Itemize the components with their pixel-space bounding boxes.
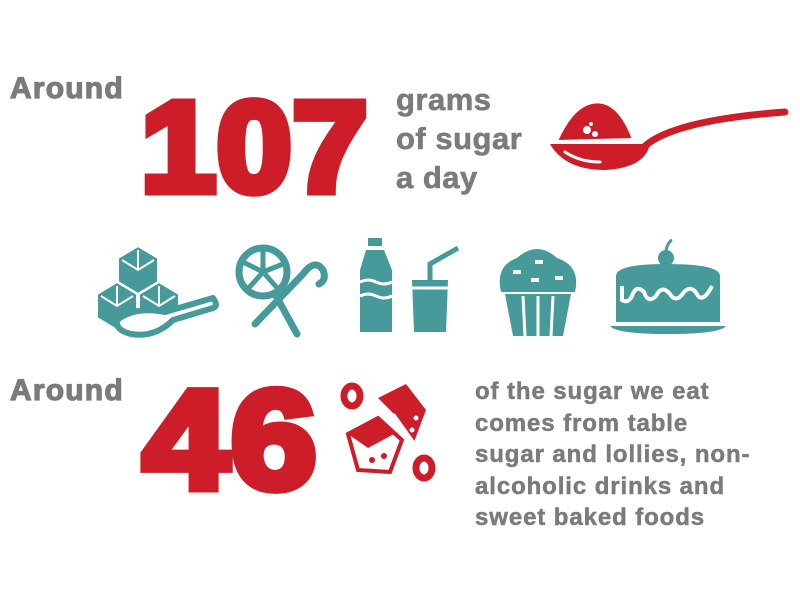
icons row <box>98 238 726 338</box>
text: sugar sources <box>475 378 750 531</box>
icon: spoon with sugar <box>550 103 788 170</box>
label: Around (bottom): Around <box>10 374 124 407</box>
big number 107: 107 <box>141 76 368 219</box>
text: sugar sources: sweet baked foods <box>475 504 705 531</box>
icon: bottle and cup <box>360 238 460 332</box>
text: grams of sugar a day <box>396 82 522 195</box>
label: Around (top): Around <box>10 72 124 105</box>
icon: cake with cherry <box>610 238 726 334</box>
icon: cupcake <box>500 249 576 336</box>
text: grams of sugar a day: a day <box>396 160 478 195</box>
text: sugar sources: sugar and lollies, non- <box>475 441 750 468</box>
text: sugar sources: of the sugar we eat <box>475 378 709 405</box>
icon: sugar cubes with spoon <box>98 247 219 338</box>
text: grams of sugar a day: grams <box>396 82 492 117</box>
text: sugar sources: comes from table <box>475 410 688 436</box>
text: sugar sources: alcoholic drinks and <box>475 472 725 500</box>
icon: percent with dice <box>340 382 436 482</box>
big number 46: 46 <box>143 361 319 518</box>
text: grams of sugar a day: of sugar <box>396 121 522 156</box>
icon: lollipop and candy cane <box>236 244 328 338</box>
